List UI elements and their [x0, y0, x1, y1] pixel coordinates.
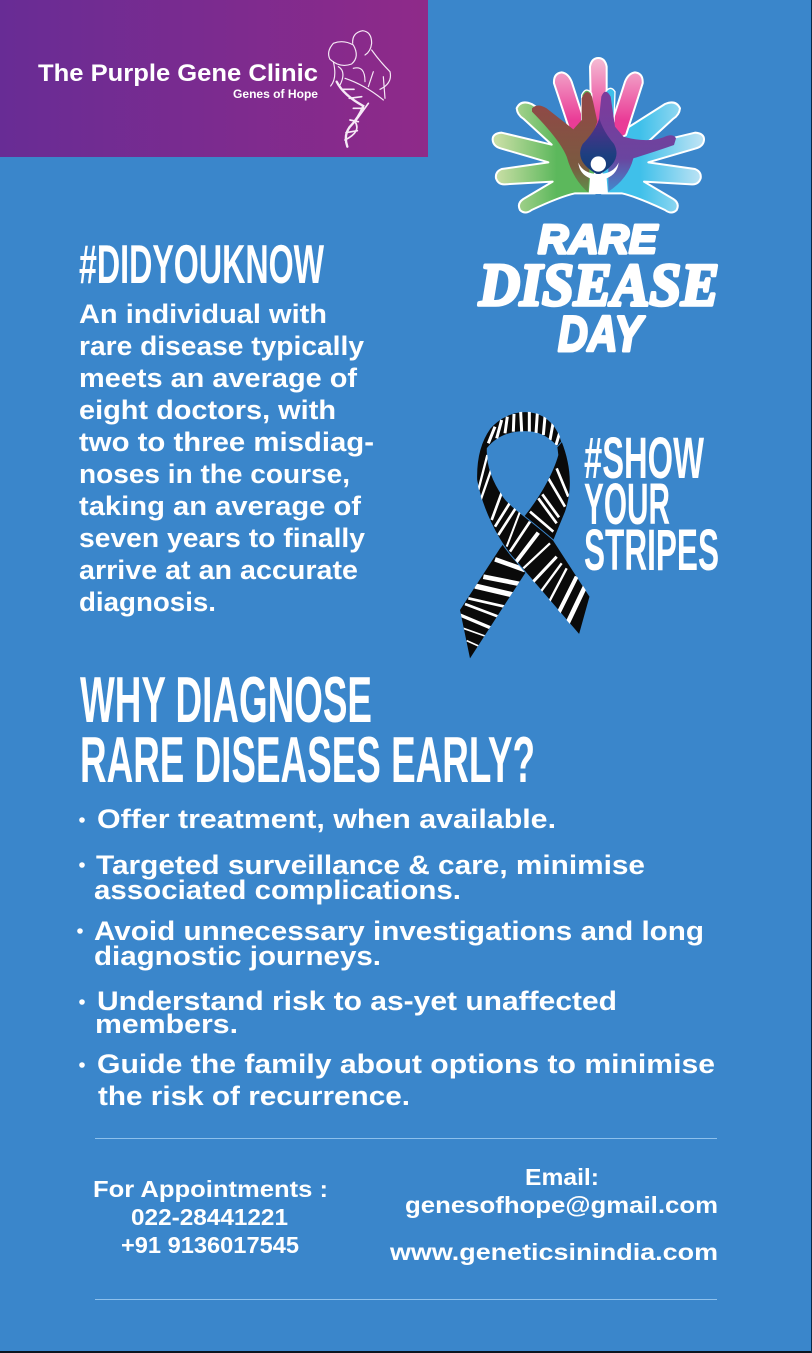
contact: email and website: Email:	[525, 1164, 599, 1190]
text block: did you know paragraph: two to three misdiag-	[79, 427, 374, 457]
bullet: family guidance	[79, 1049, 715, 1111]
heading: why diagnose rare diseases early: WHY DIAGNOSE	[80, 663, 372, 736]
icon: Rare Disease Day hands logo	[493, 58, 704, 212]
logo wordmark: Rare Disease Day: RARE	[538, 216, 659, 262]
heading: why diagnose rare diseases early	[80, 663, 535, 796]
text block: did you know paragraph	[79, 299, 374, 617]
white figure	[578, 163, 619, 194]
ribbon strand behind	[460, 442, 570, 658]
contact: email and website: www.geneticsinindia.com	[389, 1239, 718, 1265]
heading: #DIDYOUKNOW: #DIDYOUKNOW	[79, 233, 324, 295]
brown hand	[532, 92, 597, 193]
logo wordmark: Rare Disease Day: DISEASE	[478, 252, 719, 318]
contact: appointments: 022-28441221	[131, 1204, 288, 1230]
heading: #ShowYourStripes	[584, 426, 719, 583]
bullet: treatment: Offer treatment, when available.	[97, 804, 556, 834]
icon: mother and child with DNA helix	[329, 31, 390, 147]
text block: did you know paragraph: arrive at an accurate	[79, 555, 358, 585]
text block: did you know paragraph: An individual with	[79, 299, 327, 329]
left green hand	[493, 102, 595, 212]
small green and blue fingers	[582, 90, 593, 122]
right blue hand	[602, 102, 704, 212]
heading: #ShowYourStripes: YOUR	[584, 472, 670, 537]
text block: did you know paragraph: meets an average of	[79, 363, 358, 393]
water drop	[580, 118, 617, 175]
bullet: risk to members	[79, 986, 617, 1039]
logo wordmark: Rare Disease Day	[478, 216, 719, 362]
contact: appointments: +91 9136017545	[121, 1232, 299, 1258]
clinic name: The Purple Gene Clinic	[38, 60, 318, 87]
icon: zebra-striped awareness ribbon	[460, 412, 590, 658]
text block: did you know paragraph: eight doctors, with	[79, 395, 336, 425]
ribbon strand in front	[477, 412, 590, 635]
bullet: family guidance: the risk of recurrence.	[98, 1081, 410, 1111]
contact: appointments: For Appointments :	[93, 1176, 328, 1202]
bullet: family guidance: Guide the family about options to minimise	[97, 1049, 715, 1079]
bullet: investigations: diagnostic journeys.	[94, 941, 381, 971]
text block: did you know paragraph: diagnosis.	[79, 587, 216, 617]
bullet: risk to members: members.	[95, 1009, 238, 1039]
bullet: surveillance	[79, 850, 645, 905]
contact: appointments	[93, 1176, 328, 1258]
text block: did you know paragraph: taking an average of	[79, 491, 362, 521]
bullet: investigations: Avoid unnecessary investigations and long	[94, 916, 704, 946]
bullet: surveillance: Targeted surveillance & care, minimise	[96, 850, 645, 880]
text block: did you know paragraph: noses in the course,	[79, 459, 350, 489]
clinic tagline: Genes of Hope	[233, 89, 318, 101]
pink centre hand	[554, 58, 643, 150]
bullet: investigations	[77, 916, 704, 971]
bullet list: reasons to diagnose early	[77, 804, 715, 1111]
contact: email and website: genesofhope@gmail.com	[405, 1192, 718, 1218]
text block: did you know paragraph: seven years to finally	[79, 523, 365, 553]
logo wordmark: Rare Disease Day: DAY	[558, 306, 646, 362]
purple hand	[599, 92, 676, 192]
bullet: surveillance: associated complications.	[94, 875, 461, 905]
heading: #ShowYourStripes: #SHOW	[584, 426, 704, 491]
header banner: The Purple Gene Clinic	[0, 0, 428, 157]
contact: email and website	[389, 1164, 718, 1265]
text block: did you know paragraph: rare disease typically	[79, 331, 364, 361]
bullet: risk to members: Understand risk to as-yet unaffected	[97, 986, 617, 1016]
